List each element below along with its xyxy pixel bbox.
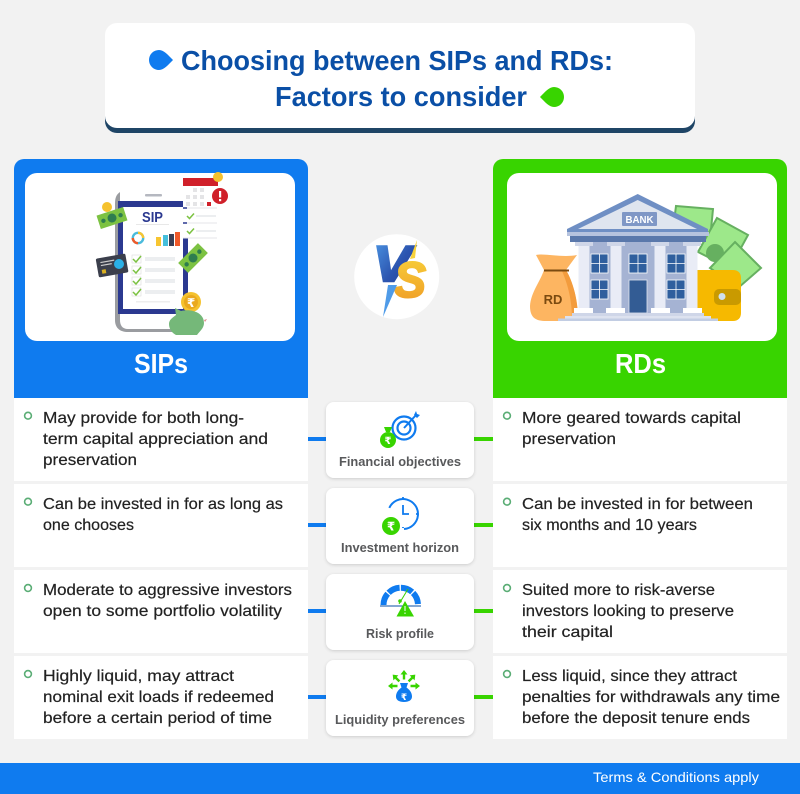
row 4 SIP: liquidity (14, 656, 308, 739)
row 2 RD: horizon (493, 484, 787, 567)
row 3 SIP: risk: open to some portfolio volatility (43, 603, 282, 620)
icon: VS badge (354, 234, 439, 319)
row 3 SIP: risk: Moderate to aggressive investors (43, 582, 292, 599)
illustration: SIP phone (96, 172, 228, 335)
row 3 RD: risk (493, 570, 787, 653)
title line 1: Choosing between SIPs and RDs: (181, 45, 613, 76)
footer bar (0, 763, 800, 794)
row 2 RD: horizon: Can be invested in for between (522, 496, 753, 513)
illustration: bank: RD (544, 292, 562, 307)
row 1 RD: objectives (493, 398, 787, 481)
icon: money bag with arrows (388, 670, 420, 703)
icon: blue drop (149, 50, 173, 70)
row 4 RD: liquidity (493, 656, 787, 739)
row 1 RD: objectives: preservation (522, 431, 616, 448)
row 1 RD: objectives: More geared towards capital (522, 410, 741, 427)
panel: RDs header (493, 159, 787, 398)
row 2 SIP: horizon (14, 484, 308, 567)
row 4 RD: liquidity: Less liquid, since they attract (522, 668, 738, 685)
card: financial objectives: Financial objectives (339, 455, 461, 469)
row 1 SIP: objectives: term capital appreciation and (43, 431, 268, 448)
title line 2: Factors to consider (275, 81, 527, 112)
card: risk profile (326, 574, 474, 650)
row 4 RD: liquidity: before the deposit tenure ends (522, 710, 750, 727)
heading: RDs: RDs (615, 348, 666, 379)
icon: VS badge: V (373, 236, 415, 292)
title card (105, 23, 695, 133)
illustration: bank (530, 194, 761, 321)
icon: clock and rupee coin: ₹ (387, 520, 395, 534)
illustration: SIP phone: SIP (142, 210, 163, 226)
icon: risk gauge (380, 588, 421, 616)
card: risk profile: Risk profile (366, 627, 434, 641)
connector lines (308, 437, 493, 699)
icon: VS badge: S (394, 252, 426, 308)
card: financial objectives (326, 402, 474, 478)
icon: clock and rupee coin (382, 497, 418, 535)
footer bar: Terms & Conditions apply (593, 769, 759, 785)
card: investment horizon (326, 488, 474, 564)
heading: SIPs: SIPs (134, 348, 188, 379)
card: liquidity preferences (326, 660, 474, 736)
panel: SIPs header (14, 159, 308, 398)
row 4 RD: liquidity: penalties for withdrawals any time (522, 689, 780, 706)
row 4 SIP: liquidity: nominal exit loads if redeemed (43, 689, 274, 706)
illustration: SIP phone: ₹ (187, 296, 195, 310)
row 1 SIP: objectives: preservation (43, 452, 137, 469)
row 2 RD: horizon: six months and 10 years (522, 517, 697, 534)
icon: money bag with arrows: ₹ (401, 693, 407, 703)
card: investment horizon: Investment horizon (341, 541, 459, 555)
icon: target and money bag (380, 411, 420, 448)
icon: target and money bag: ₹ (385, 436, 392, 447)
row 1 SIP: objectives (14, 398, 308, 481)
row 3 RD: risk: Suited more to risk-averse (522, 582, 715, 599)
row 2 SIP: horizon: Can be invested in for as long as (43, 496, 283, 513)
row 3 RD: risk: investors looking to preserve (522, 603, 734, 620)
illustration: bank: BANK (626, 215, 654, 226)
row 1 SIP: objectives: May provide for both long- (43, 410, 244, 427)
card: liquidity preferences: Liquidity preferences (335, 713, 465, 727)
row 3 SIP: risk (14, 570, 308, 653)
row 4 SIP: liquidity: Highly liquid, may attract (43, 668, 235, 685)
row 4 SIP: liquidity: before a certain period of time (43, 710, 272, 727)
row 2 SIP: horizon: one chooses (43, 517, 134, 534)
row 3 RD: risk: their capital (522, 624, 613, 641)
icon: green drop (540, 87, 564, 107)
